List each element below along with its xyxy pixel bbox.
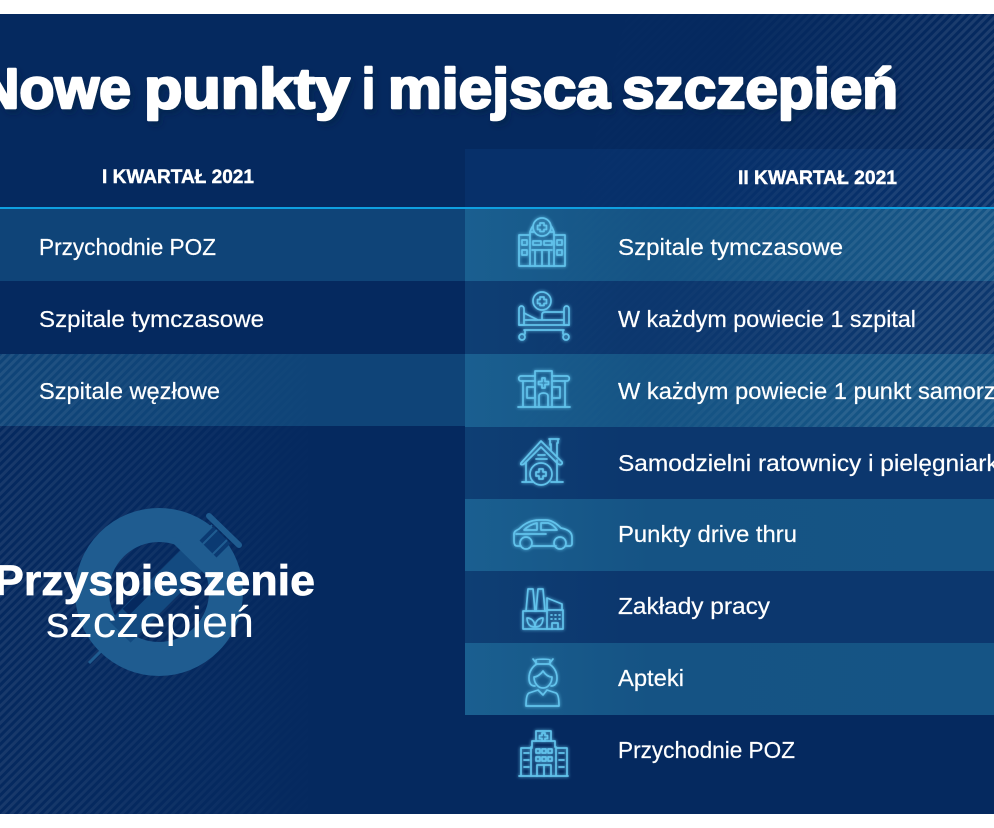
- icon: car: [514, 520, 572, 549]
- title: punkty: [144, 57, 350, 121]
- heading: Przyspieszenie: Przyspieszenie: [0, 557, 315, 605]
- right list: Apteki: [618, 665, 684, 691]
- title: miejsca: [388, 57, 611, 121]
- title: [0, 57, 898, 121]
- left list: Szpitale węzłowe: [39, 378, 220, 404]
- right list: Przychodnie POZ: [618, 737, 795, 763]
- heading: szczepień: szczepień: [46, 598, 254, 647]
- icon: home with cross: [521, 439, 563, 485]
- heading: II kwartał: II KWARTAŁ 2021: [738, 168, 897, 189]
- icon: syringe badge: [89, 516, 239, 663]
- right list: Punkty drive thru: [618, 521, 797, 547]
- icon: nurse: [526, 659, 559, 706]
- icon: hospital: [519, 218, 565, 266]
- right list: Samodzielni ratownicy i pielęgniarki: [618, 450, 994, 476]
- right list: Szpitale tymczasowe: [618, 234, 843, 260]
- panel: right column: [465, 149, 994, 814]
- header rule: [0, 207, 994, 209]
- left list: [39, 234, 264, 404]
- icon: factory: [523, 589, 563, 629]
- left list: Przychodnie POZ: [39, 234, 216, 260]
- title: szczepień: [622, 57, 898, 121]
- icon: clinic: [518, 371, 570, 407]
- icon: clinic building: [519, 731, 568, 776]
- title: i: [362, 57, 375, 121]
- right list: Zakłady pracy: [618, 593, 771, 619]
- heading: I kwartał: I KWARTAŁ 2021: [102, 167, 254, 188]
- left list: Szpitale tymczasowe: [39, 306, 264, 332]
- panel: left rows: [0, 209, 465, 426]
- right list: [618, 234, 994, 763]
- icon: hospital bed: [519, 292, 569, 340]
- right list: W każdym powiecie 1 szpital: [618, 306, 916, 332]
